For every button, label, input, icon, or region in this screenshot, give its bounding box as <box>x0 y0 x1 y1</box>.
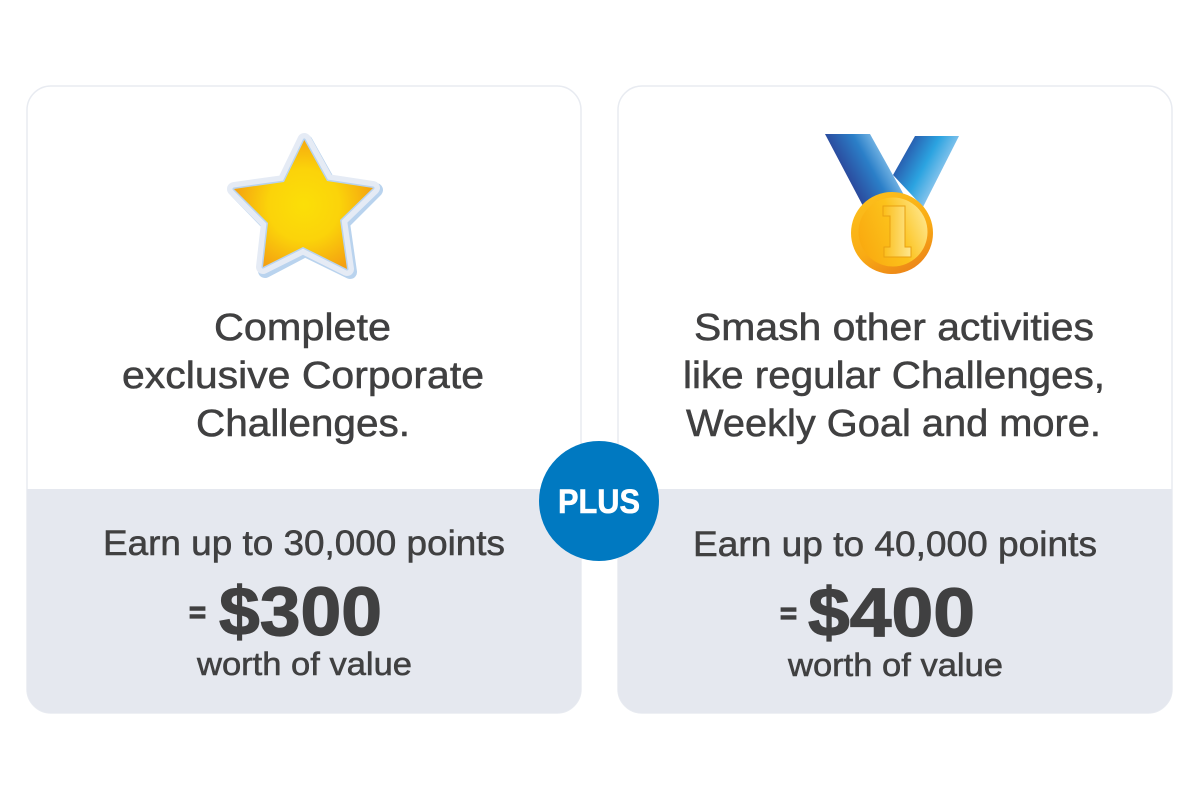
value: $300: = <box>189 597 206 629</box>
text: worth of value: worth of value <box>787 647 1003 683</box>
icon: star <box>234 140 376 272</box>
heading: complete corporate challenges: Challenges. <box>196 403 410 445</box>
icon: medal <box>825 134 959 274</box>
badge: plus: PLUS <box>558 483 640 521</box>
text: worth of value: worth of value <box>196 646 412 682</box>
badge: plus <box>539 441 659 561</box>
panel: corporate challenges <box>27 86 581 713</box>
card background <box>618 86 1172 713</box>
text: earn 40,000 points: Earn up to 40,000 points <box>693 525 1097 564</box>
heading: complete corporate challenges <box>122 307 484 445</box>
heading: smash other activities: Weekly Goal and more. <box>686 403 1101 445</box>
value: $400: $400 <box>808 574 975 651</box>
heading: smash other activities: Smash other activities <box>694 307 1094 349</box>
heading: smash other activities: like regular Challenges, <box>683 355 1105 397</box>
value: $300: $300 <box>219 573 382 650</box>
panel: other activities <box>618 86 1172 713</box>
card background <box>27 86 581 713</box>
text: earn 30,000 points: Earn up to 30,000 points <box>103 524 505 563</box>
value: $400: = <box>780 598 797 630</box>
heading: complete corporate challenges: Complete <box>214 307 391 349</box>
heading: complete corporate challenges: exclusive Corporate <box>122 355 484 397</box>
card value band <box>27 489 581 713</box>
heading: smash other activities <box>683 307 1105 445</box>
card value band <box>618 489 1172 713</box>
